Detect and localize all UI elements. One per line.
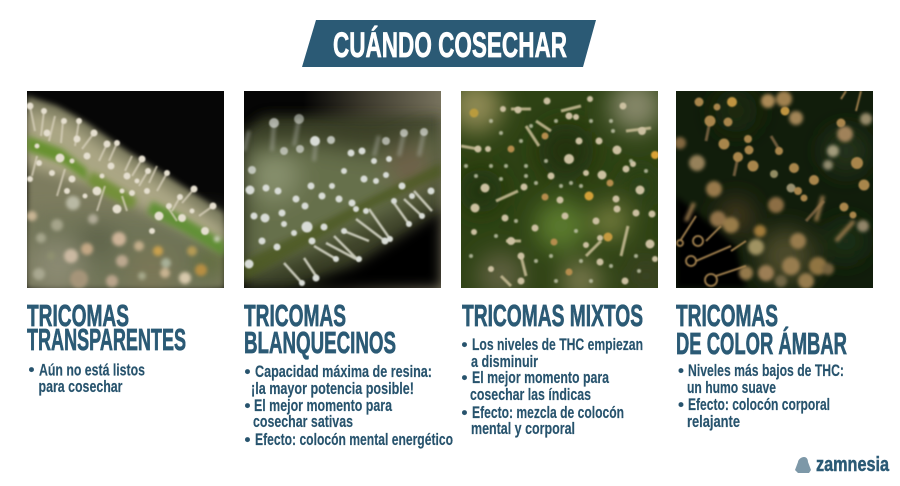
heading (27, 298, 186, 357)
bullet list: • (462, 335, 468, 354)
bullet list: Niveles más bajos de THC: (688, 361, 844, 380)
bullet list: para cosechar (38, 377, 123, 396)
photo: cloudy white trichomes (244, 91, 441, 288)
photo: transparent trichomes (26, 91, 228, 295)
icon: logo emblem (795, 457, 811, 473)
heading: TRICOMAS (676, 298, 778, 333)
bullet list: ¡la mayor potencia posible! (251, 379, 414, 398)
heading: TRICOMAS MIXTOS (462, 298, 643, 333)
bullet list: mental y corporal (471, 419, 575, 438)
bullet list: Capacidad máxima de resina: (255, 362, 432, 381)
column: transparent (27, 298, 186, 396)
title banner (302, 20, 596, 67)
photo: amber trichomes (674, 89, 873, 289)
heading: TRANSPARENTES (27, 322, 186, 357)
bullet list: El mejor momento para (254, 396, 392, 415)
heading: BLANQUECINOS (244, 325, 396, 360)
bullet list: • (462, 368, 468, 387)
column: mixed (462, 298, 643, 438)
heading (244, 298, 396, 360)
heading: TRICOMAS (27, 298, 129, 333)
bullet list: Efecto: colocón corporal (688, 395, 830, 414)
column: amber (676, 298, 847, 431)
bullet list (244, 362, 453, 449)
bullet list: Efecto: colocón mental energético (255, 430, 453, 449)
bullet list: cosechar sativas (253, 412, 353, 431)
bullet list: • (462, 403, 468, 422)
column: cloudy (244, 298, 453, 449)
photo: mixed trichomes (461, 91, 658, 288)
bullet list (678, 361, 844, 431)
bullet list (28, 360, 145, 396)
bullet list (462, 335, 643, 438)
bullet list: • (678, 361, 684, 380)
bullet list: cosechar las índicas (470, 385, 591, 404)
title banner: CUÁNDO COSECHAR (333, 25, 567, 65)
bullet list: El mejor momento para (472, 368, 609, 387)
heading: TRICOMAS (244, 298, 346, 333)
bullet list: • (28, 360, 34, 379)
bullet list: • (244, 430, 250, 449)
bullet list: • (678, 395, 684, 414)
bullet list: • (244, 362, 250, 381)
bullet list: un humo suave (687, 378, 776, 397)
bullet list: Los niveles de THC empiezan (472, 335, 643, 354)
bullet list: Aún no está listos (39, 360, 145, 380)
bullet list: a disminuir (471, 352, 538, 371)
bullet list: • (244, 396, 250, 415)
bullet list: Efecto: mezcla de colocón (472, 403, 624, 422)
bullet list: relajante (687, 412, 740, 431)
heading (676, 298, 847, 361)
